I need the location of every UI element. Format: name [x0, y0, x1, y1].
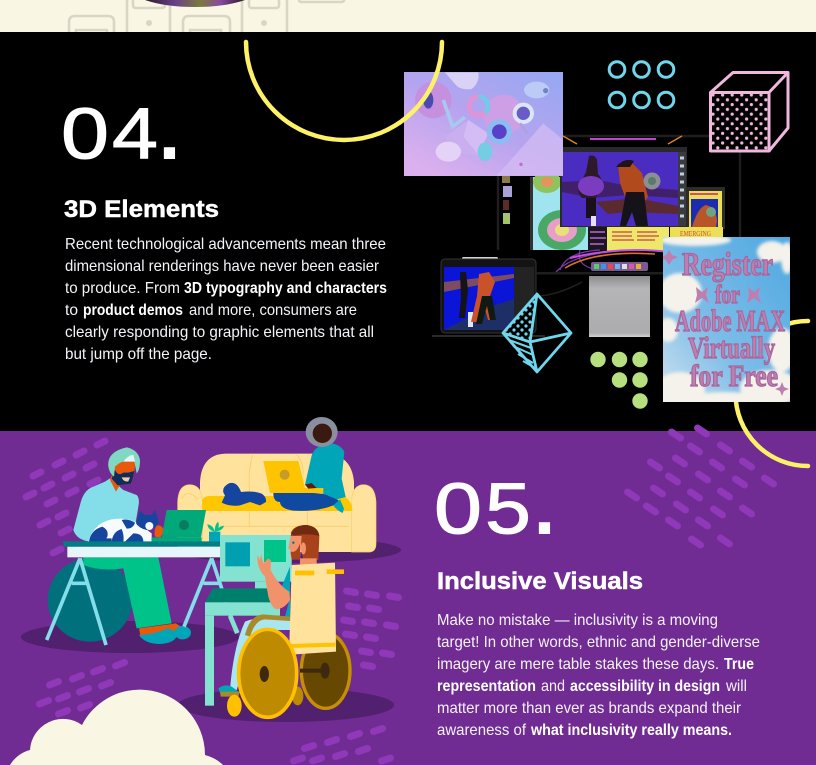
text block: inclusive visuals body: imagery are mere table stakes these days. [437, 656, 719, 673]
text block: 3D elements body: to produce. From [65, 280, 180, 297]
yellow arc top [246, 42, 442, 140]
text block: inclusive visuals body: what inclusivity really means. [530, 722, 732, 739]
text block: 3D elements body: and more, consumers are [189, 302, 357, 319]
panel: 3D elements black background [0, 32, 816, 431]
image: cloud poster: Virtually [688, 330, 775, 365]
image: cloud poster [663, 237, 790, 402]
text block: inclusive visuals body: matter more than ever as brands expand their [437, 700, 742, 717]
text block: 3D elements body: dimensional renderings have never been easier [65, 258, 380, 275]
number: 05: 5 [485, 470, 531, 550]
text block: 3D elements body: to [65, 302, 78, 319]
text block: inclusive visuals body: will [725, 678, 747, 695]
text block: 3D elements body: Recent technological advancements mean three [65, 236, 386, 253]
icon: dotted cube [710, 72, 788, 151]
number: 04: 4 [112, 94, 158, 174]
wheelchair user and side desk [205, 525, 350, 717]
icon: green dots [590, 352, 648, 409]
text block: 3D elements body: clearly responding to graphic elements that all [65, 324, 374, 341]
device mockup collage [490, 136, 740, 251]
yellow arc right [736, 321, 808, 466]
icon: blue octahedron [503, 294, 571, 372]
text block: inclusive visuals body [437, 612, 760, 739]
number: 04: . [160, 94, 180, 174]
heading: Inclusive Visuals: Inclusive Visuals [437, 568, 643, 595]
image: cloud poster: Register [682, 247, 773, 283]
icon: blue circles [609, 62, 674, 108]
image: tablet mockup [432, 257, 582, 337]
device mockup collage: EMERGING [680, 230, 711, 238]
text block: 3D elements body: product demos [83, 302, 183, 319]
text block: inclusive visuals body: and [541, 678, 565, 695]
decorative dashes: right of wheelchair [344, 591, 398, 666]
decorative dashes: top right [628, 428, 774, 545]
text block: inclusive visuals body: awareness of [437, 722, 527, 739]
top cream band [0, 0, 816, 32]
number: 05 [434, 470, 554, 550]
number: 04 [61, 94, 180, 174]
text block: 3D elements body: 3D typography and characters [184, 280, 387, 297]
man, cat and main desk [47, 447, 237, 645]
image: desktop monitor stand [536, 250, 670, 337]
number: 05: 0 [434, 470, 482, 550]
shadows under furniture [21, 537, 401, 722]
image: cloud poster: for Free [690, 358, 778, 393]
heading: 3D Elements: 3D Elements [64, 196, 219, 223]
number: 05: . [534, 470, 554, 550]
image: 3D abstract render [404, 72, 563, 176]
text block: 3D elements body: but jump off the page. [65, 346, 212, 363]
text block: inclusive visuals body: accessibility in design [570, 678, 720, 695]
text block: inclusive visuals body: representation [437, 678, 536, 695]
text block: inclusive visuals body: Make no mistake — inclusivity is a moving [437, 612, 718, 629]
text block: 3D elements body [65, 236, 387, 363]
panel: inclusive visuals purple background [0, 431, 816, 765]
text block: inclusive visuals body: target! In other words, ethnic and gender-diverse [437, 634, 760, 651]
decorative dashes: bottom right [294, 728, 390, 761]
decorative dashes: bottom left [40, 662, 124, 714]
decorative dashes: top left [26, 441, 105, 553]
number: 04: 0 [61, 94, 109, 174]
sofa and woman [178, 417, 376, 552]
image: cloud poster: for [715, 280, 740, 309]
text block: inclusive visuals body: True [724, 656, 754, 673]
illustration: inclusive workspace [21, 417, 401, 722]
cloud [10, 690, 223, 765]
